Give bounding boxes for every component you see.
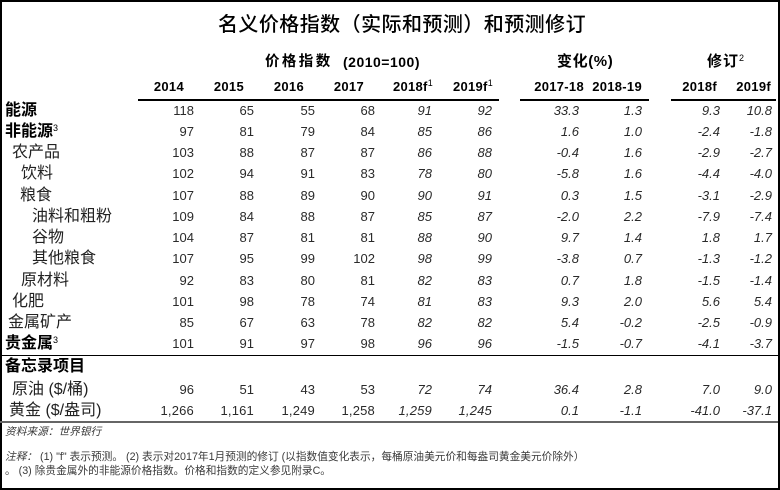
row: oils and meals: 油料和粗粉 [32,208,112,225]
row: food: 88 [240,188,254,203]
row: beverages [21,164,772,182]
row: fertilizers: 化肥 [12,293,44,310]
column year headers: 2018f [682,79,717,94]
row: metals and minerals [8,313,772,331]
row: precious metals: 101 [172,336,194,351]
row: precious metals: -3.7 [750,336,772,351]
row: energy: 10.8 [747,103,772,118]
row: other food: 107 [172,251,194,266]
row: other food: 98 [418,251,432,266]
row: raw materials: -1.5 [698,273,720,288]
row: metals and minerals: 5.4 [561,315,579,330]
row: agriculture: 86 [418,145,432,160]
column year headers: 2017 [334,79,364,94]
row: agriculture: 农产品 [12,144,60,161]
row: precious metals: 97 [301,336,315,351]
row: agriculture: -0.4 [557,145,579,160]
column year headers: 2016 [274,79,304,94]
row: metals and minerals: -0.2 [620,315,642,330]
row: food: -3.1 [698,188,720,203]
column group heading: price index [265,53,420,70]
row: fertilizers: 83 [478,294,492,309]
row: gold: -41.0 [690,403,720,418]
row: other food: -3.8 [557,251,579,266]
row: crude oil [12,380,772,398]
row: fertilizers: 74 [361,294,375,309]
row: food [20,186,772,204]
row: grains: 谷物 [32,229,64,246]
row: other food: 99 [301,251,315,266]
row: energy [5,101,772,119]
row: agriculture: -2.7 [750,145,772,160]
row: precious metals: 贵金属3 [5,335,58,352]
row: crude oil: 72 [418,382,432,397]
row: grains: 87 [240,230,254,245]
row: grains: 1.4 [624,230,642,245]
row: non-energy: 84 [361,124,375,139]
row: oils and meals: 84 [240,209,254,224]
row: other food: -1.2 [750,251,772,266]
row: beverages: -5.8 [557,166,579,181]
row: gold [9,401,772,419]
row: gold: -1.1 [620,403,642,418]
row: metals and minerals: 85 [180,315,194,330]
footnotes: 注释： (1) "f" 表示预测。 (2) 表示对2017年1月预测的修订 (以指数值变化表示，每桶原油美元价和每盎司黄金美元价除外） [5,451,584,463]
row: beverages: 饮料 [21,165,53,182]
row: oils and meals [32,207,772,225]
text: (2010=100) [343,54,420,70]
row: crude oil: 36.4 [554,382,579,397]
row: non-energy: 79 [301,124,315,139]
row: grains: 81 [301,230,315,245]
row: beverages: -4.0 [750,166,772,181]
row: beverages: 80 [478,166,492,181]
row: energy: 92 [478,103,492,118]
row: precious metals: 96 [418,336,432,351]
row: beverages: 1.6 [624,166,642,181]
row: raw materials: 1.8 [624,273,642,288]
row: non-energy: 86 [478,124,492,139]
row: crude oil: 原油 ($/桶) [12,381,88,398]
row: gold: 1,245 [458,403,492,418]
row: precious metals: 91 [240,336,254,351]
row: gold: -37.1 [742,403,772,418]
row: fertilizers: 101 [172,294,194,309]
row: raw materials [21,271,772,289]
row: food: 1.5 [624,188,642,203]
row: agriculture: 87 [361,145,375,160]
row: oils and meals: 87 [478,209,492,224]
row: raw materials: 92 [180,273,194,288]
row: gold: 1,161 [220,403,254,418]
row: fertilizers: 9.3 [561,294,579,309]
row: other food: 99 [478,251,492,266]
row: non-energy: 81 [240,124,254,139]
row: grains: 1.7 [754,230,772,245]
row: oils and meals: 88 [301,209,315,224]
row: other food: 102 [353,251,375,266]
row: crude oil: 53 [361,382,375,397]
row: raw materials: 81 [361,273,375,288]
row: grains: 88 [418,230,432,245]
row: memo items heading: 备忘录项目 [5,358,85,375]
row: other food: 0.7 [624,251,642,266]
row: fertilizers: 5.6 [702,294,720,309]
row: raw materials: 83 [478,273,492,288]
row: non-energy: 85 [418,124,432,139]
row: crude oil: 2.8 [624,382,642,397]
row: grains: 81 [361,230,375,245]
row: food: 90 [361,188,375,203]
row: agriculture: 88 [478,145,492,160]
row: other food: 95 [240,251,254,266]
row: raw materials: -1.4 [750,273,772,288]
row: agriculture: 1.6 [624,145,642,160]
footnotes: 。 (3) 除贵金属外的非能源价格指数。价格和指数的定义参见附录C。 [5,465,331,477]
row: crude oil: 43 [301,382,315,397]
row: grains: 1.8 [702,230,720,245]
row: raw materials: 80 [301,273,315,288]
row: raw materials: 83 [240,273,254,288]
row: metals and minerals: 金属矿产 [8,314,72,331]
column year headers: 2015 [214,79,244,94]
row: other food: 其他粮食 [32,250,96,267]
row: fertilizers: 78 [301,294,315,309]
row: gold: 1,258 [341,403,375,418]
row: non-energy [5,122,772,140]
row: grains: 90 [478,230,492,245]
row: gold: 黄金 ($/盎司) [9,402,101,419]
row: beverages: 94 [240,166,254,181]
row: food: 107 [172,188,194,203]
row: beverages: 102 [172,166,194,181]
row: oils and meals: -7.4 [750,209,772,224]
row: agriculture: -2.9 [698,145,720,160]
row: agriculture: 103 [172,145,194,160]
row: metals and minerals: 63 [301,315,315,330]
column year headers: 2019f [736,79,771,94]
row: fertilizers: 98 [240,294,254,309]
row: oils and meals: 85 [418,209,432,224]
row: metals and minerals: -2.5 [698,315,720,330]
row: energy: 118 [173,103,194,118]
row: food: 粮食 [20,187,52,204]
row: food: 91 [478,188,492,203]
row: metals and minerals: 82 [418,315,432,330]
row: food: 89 [301,188,315,203]
row: grains: 9.7 [561,230,579,245]
row: crude oil: 96 [180,382,194,397]
row: gold: 0.1 [561,403,579,418]
row: crude oil: 51 [240,382,254,397]
row: metals and minerals: -0.9 [750,315,772,330]
row: crude oil: 9.0 [754,382,772,397]
row: food: 90 [418,188,432,203]
row: energy: 1.3 [624,103,642,118]
row: fertilizers: 81 [418,294,432,309]
row: oils and meals: -2.0 [557,209,579,224]
row: metals and minerals: 78 [361,315,375,330]
row: beverages: 83 [361,166,375,181]
row: beverages: 78 [418,166,432,181]
row: precious metals: 96 [478,336,492,351]
row: oils and meals: 2.2 [624,209,642,224]
row: metals and minerals: 67 [240,315,254,330]
row: grains [32,228,772,246]
footnotes [5,450,584,477]
row: non-energy: 1.0 [624,124,642,139]
row: non-energy: 97 [180,124,194,139]
row: energy: 能源 [5,102,37,119]
row: precious metals: -4.1 [698,336,720,351]
row: food: -2.9 [750,188,772,203]
column group heading: price index: 价格指数 [265,54,333,70]
row: non-energy: 非能源3 [5,123,58,140]
row: precious metals: 98 [361,336,375,351]
column year headers: 2017-18 [534,79,584,94]
row: gold: 1,266 [160,403,194,418]
row: energy: 9.3 [702,103,720,118]
row: crude oil: 74 [478,382,492,397]
row: crude oil: 7.0 [702,382,720,397]
row: precious metals: -1.5 [557,336,579,351]
row: non-energy: -1.8 [750,124,772,139]
row: fertilizers: 2.0 [624,294,642,309]
column year headers: 2019f1 [453,78,493,94]
column group heading: change: 变化(%) [557,53,613,70]
row: oils and meals: -7.9 [698,209,720,224]
row: beverages: 91 [301,166,315,181]
row: energy: 33.3 [554,103,579,118]
row: agriculture: 88 [240,145,254,160]
row: metals and minerals: 82 [478,315,492,330]
row: agriculture: 87 [301,145,315,160]
row: precious metals: -0.7 [620,336,642,351]
row: oils and meals: 87 [361,209,375,224]
row: agriculture [12,143,772,161]
source line: 资料来源：世界银行 [5,426,101,438]
row: food: 0.3 [561,188,579,203]
row: non-energy: 1.6 [561,124,579,139]
title: 名义价格指数（实际和预测）和预测修订 [218,14,586,36]
row: raw materials: 82 [418,273,432,288]
row: energy: 65 [240,103,254,118]
row: raw materials: 0.7 [561,273,579,288]
row: fertilizers [12,292,772,310]
row: energy: 55 [301,103,315,118]
row: energy: 68 [361,103,375,118]
column year headers: 2018f1 [393,78,433,94]
row: grains: 104 [172,230,194,245]
row: gold: 1,259 [398,403,432,418]
column year headers: 2018-19 [592,79,642,94]
row: fertilizers: 5.4 [754,294,772,309]
row: oils and meals: 109 [172,209,194,224]
row: other food [32,249,772,267]
row: raw materials: 原材料 [21,272,69,289]
column year headers [154,78,771,94]
column group heading: revisions: 修订2 [707,53,745,70]
row: other food: -1.3 [698,251,720,266]
row: precious metals [5,334,772,352]
row: non-energy: -2.4 [698,124,720,139]
row: energy: 91 [418,103,432,118]
column year headers: 2014 [154,79,184,94]
row: gold: 1,249 [281,403,315,418]
row: beverages: -4.4 [698,166,720,181]
